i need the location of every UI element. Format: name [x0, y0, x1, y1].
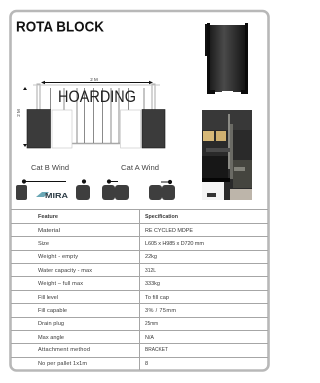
specification column: To fill cap	[145, 295, 169, 301]
feature column: Max angle	[38, 335, 64, 341]
specification column: 22kg	[145, 254, 157, 260]
specification column	[145, 214, 204, 367]
height arrow ends	[23, 87, 27, 147]
title: ROTA BLOCK	[16, 18, 104, 36]
left dark block	[27, 110, 50, 148]
plan view blocks	[16, 180, 175, 200]
photo: installed block at site	[202, 110, 252, 200]
specification column: L605 x H985 x D720 mm	[145, 241, 204, 247]
fence posts and rails	[33, 84, 160, 144]
feature column: Feature	[38, 214, 58, 220]
spec table	[11, 209, 268, 370]
right dark block	[142, 110, 165, 148]
feature column: No per pallet 1x1m	[38, 361, 87, 367]
label: Cat A Wind: Cat A Wind	[121, 163, 159, 172]
feature column: Weight – full max	[38, 281, 83, 287]
diagram: hoarding elevation	[16, 77, 165, 148]
panel: outer frame	[10, 11, 268, 370]
width arrow	[41, 81, 153, 84]
wind lines and pins	[22, 180, 172, 184]
specification column: 8	[145, 361, 148, 367]
left white block	[52, 110, 72, 148]
feature column: Weight - empty	[38, 254, 78, 260]
specification column: BRACKET	[145, 347, 169, 353]
feature column: Water capacity - max	[38, 268, 92, 274]
specification column: RE CYCLED MDPE	[145, 228, 193, 234]
label: Cat B Wind: Cat B Wind	[31, 163, 69, 172]
logo: MIRA	[36, 191, 69, 200]
right white block	[120, 110, 140, 148]
feature column: Fill capable	[38, 308, 67, 314]
plan block group	[16, 185, 175, 200]
fence bars	[50, 88, 144, 143]
feature column: Fill level	[38, 295, 58, 301]
specification column: 25mm	[145, 321, 158, 327]
feature column: Attachment method	[38, 347, 90, 353]
icon: product photo of black block	[205, 23, 248, 94]
logo: MIRA: MIRA	[45, 191, 69, 200]
specification column: Specification	[145, 214, 179, 220]
specification column: 3% / 75mm	[145, 308, 176, 314]
table grid	[11, 209, 268, 370]
feature column: Drain plug	[38, 321, 64, 327]
width label: 2 M	[90, 77, 98, 82]
feature column	[38, 214, 92, 367]
hoarding label: HOARDING	[58, 88, 136, 106]
specification column: N/A	[145, 335, 154, 341]
specification column: 312L	[145, 268, 156, 274]
height label: 2 M	[16, 109, 21, 117]
specification column: 333kg	[145, 281, 160, 287]
feature column: Size	[38, 241, 49, 247]
feature column: Material	[38, 228, 60, 234]
